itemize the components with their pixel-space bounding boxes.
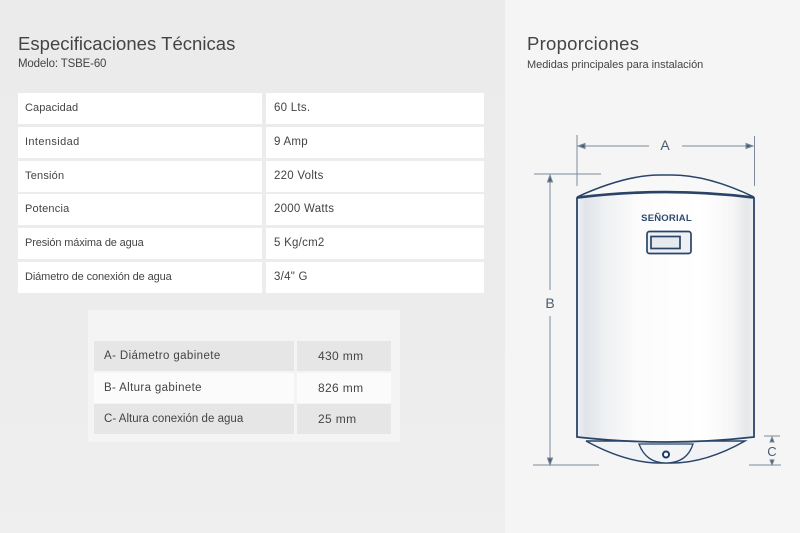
specifications table: 9 Amp xyxy=(274,136,308,148)
title: technical specifications: Especificaciones Técnicas xyxy=(18,33,235,54)
water heater dimension diagram xyxy=(533,135,781,466)
control panel xyxy=(647,232,691,254)
dimension A: A xyxy=(660,137,670,153)
dimensions table panel: C- Altura conexión de agua xyxy=(104,413,243,425)
specifications table: Capacidad xyxy=(25,102,78,114)
specifications table: Presión máxima de agua xyxy=(25,237,144,249)
specifications table: 3/4" G xyxy=(274,271,308,283)
subtitle: model: Modelo: TSBE-60 xyxy=(18,58,106,70)
specifications table: 220 Volts xyxy=(274,170,324,182)
dimension A xyxy=(577,135,754,186)
heater top dome xyxy=(577,175,754,197)
specifications table: Intensidad xyxy=(25,136,80,148)
title: proportions: Proporciones xyxy=(527,33,639,54)
dimensions table panel: 25 mm xyxy=(318,412,356,426)
specifications table: Diámetro de conexión de agua xyxy=(25,271,172,283)
dimensions table panel: A- Diámetro gabinete xyxy=(104,350,221,362)
specifications table: Tensión xyxy=(25,170,64,182)
right background panel xyxy=(505,0,800,533)
specifications table: 60 Lts. xyxy=(274,102,310,114)
subtitle: main measurements: Medidas principales para instalación xyxy=(527,59,703,71)
specifications table: 5 Kg/cm2 xyxy=(274,237,325,249)
heater body xyxy=(577,192,754,442)
dimension B xyxy=(533,174,601,465)
heater bottom cap xyxy=(586,441,745,463)
dimension C: C xyxy=(767,444,777,459)
dimension B: B xyxy=(545,295,555,311)
dimension C xyxy=(749,436,781,465)
specifications table xyxy=(18,93,484,293)
dimensions table panel: 826 mm xyxy=(318,381,363,395)
specifications table: Potencia xyxy=(25,203,69,215)
left background panel xyxy=(0,0,505,533)
specifications table: 2000 Watts xyxy=(274,203,334,215)
brand logo: SEÑORIAL xyxy=(641,213,692,224)
dimensions table panel: B- Altura gabinete xyxy=(104,382,202,394)
dimensions table panel: 430 mm xyxy=(318,349,363,363)
dimensions table panel xyxy=(88,310,400,442)
